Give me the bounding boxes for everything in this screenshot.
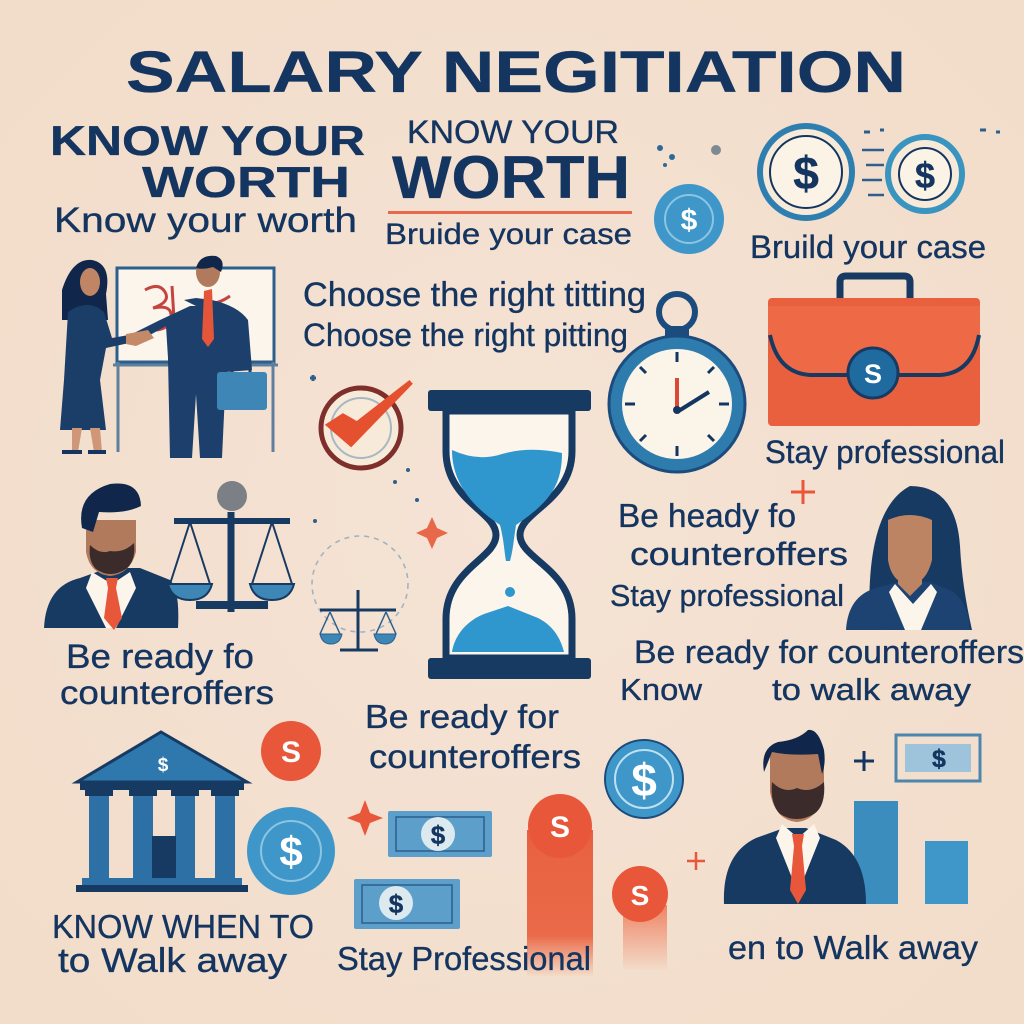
heading: know your worth centre: Bruide your case [385, 218, 632, 251]
text: be ready right block: Stay professional [610, 578, 844, 613]
icon: plus and small banknote: $ [932, 745, 946, 773]
icon: orange coin with fade [612, 866, 668, 970]
text: be ready centre: counteroffers [369, 738, 581, 775]
icon: blue dollar coin: $ [279, 828, 303, 875]
icon: dollar coins with speed lines: $ [793, 147, 819, 199]
text: be ready right block: Be heady fo [618, 497, 796, 534]
icon: orange dollar coin [261, 721, 321, 781]
icon: orange briefcase: S [864, 359, 882, 389]
icon: orange dollar coin: S [281, 736, 301, 769]
icon: orange star [347, 800, 383, 836]
icon: orange coin stack [527, 794, 593, 976]
icon: banknote lower [354, 879, 460, 929]
icon: stopwatch [609, 294, 745, 472]
text: be ready and walk away right [620, 634, 1024, 707]
illustration: bearded man with scales [44, 483, 178, 630]
icon: bank building: $ [158, 755, 169, 776]
text: be ready and walk away right: Know [620, 672, 703, 707]
icon: blue coin centre: $ [631, 754, 657, 806]
icon: blue coin centre [605, 740, 683, 818]
icon: hourglass [428, 390, 591, 679]
heading: know your worth left: Know your worth [54, 201, 357, 240]
icon: small dollar coin: $ [681, 204, 698, 237]
text: be ready left [60, 638, 274, 711]
text: know when to walk away [52, 908, 314, 980]
text: be ready centre: Be ready for [365, 698, 559, 735]
text: choose the right timing: Choose the right titting [303, 276, 646, 314]
text: be ready right block: counteroffers [630, 536, 848, 572]
text: stay professional bottom: Stay Professional [337, 940, 591, 977]
heading: know your worth centre [385, 114, 632, 251]
icon: blue dollar coin [247, 807, 335, 895]
icon: small dollar coin [654, 184, 724, 254]
icon: orange briefcase [768, 276, 980, 426]
icon: banknote upper [388, 811, 492, 857]
icon: orange plus [791, 480, 815, 504]
text: choose the right timing [303, 276, 646, 353]
icon: dollar coins with speed lines [760, 126, 1000, 218]
icon: orange coin stack: S [550, 811, 570, 844]
icon: plus and small banknote [854, 735, 980, 781]
text: be ready left: counteroffers [60, 674, 274, 711]
heading: know your worth left: KNOW YOUR [50, 117, 365, 164]
heading: know your worth left: WORTH [142, 158, 350, 207]
text: know when to walk away: KNOW WHEN TO [52, 908, 314, 945]
icon: small balance scale in circle [312, 536, 408, 650]
icon: sparkle dots [657, 145, 721, 167]
illustration: handshake at whiteboard [60, 256, 278, 458]
text: be ready and walk away right: Be ready for counteroffers [634, 634, 1024, 670]
heading: know your worth centre: WORTH [392, 144, 630, 211]
text: be ready right block [610, 497, 848, 613]
illustration: woman portrait [846, 486, 972, 630]
illustration: man in suit with bars [724, 730, 968, 904]
icon: small plus [687, 852, 705, 870]
text: build your case: Bruild your case [750, 229, 986, 265]
icon: banknote upper: $ [431, 820, 446, 850]
icon: bank building [76, 732, 248, 892]
text: be ready and walk away right: to walk away [772, 672, 972, 707]
icon: orange coin with fade: S [631, 880, 649, 911]
title: SALARY NEGITIATION [126, 40, 906, 105]
icon: check mark badge [310, 375, 411, 468]
heading: know your worth centre: KNOW YOUR [407, 114, 619, 150]
text: to walk away bottom: en to Walk away [728, 929, 979, 966]
text: stay professional top: Stay professional [765, 434, 1005, 470]
heading: know your worth left [50, 117, 365, 240]
icon: banknote lower: $ [389, 889, 404, 919]
text: be ready centre [365, 698, 581, 775]
text: choose the right timing: Choose the right pitting [303, 317, 628, 353]
text: know when to walk away: to Walk away [58, 942, 287, 980]
text: be ready left: Be ready fo [66, 638, 254, 676]
icon: large balance scale [168, 481, 294, 612]
icon: sparkles near hourglass [313, 468, 448, 549]
icon: dollar coins with speed lines: $ [915, 155, 935, 196]
